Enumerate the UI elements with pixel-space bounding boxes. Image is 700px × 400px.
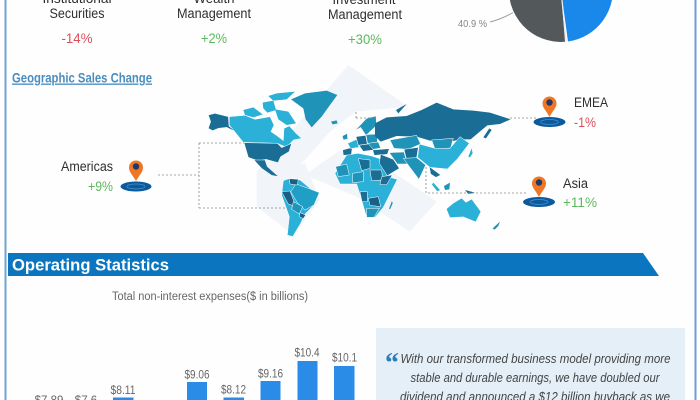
map: europe	[342, 116, 389, 155]
label: americas: Americas	[61, 159, 113, 174]
segment: investment management: Management	[328, 7, 402, 22]
segment: investment management: +30%	[348, 31, 382, 47]
icon: americas pin	[120, 160, 152, 192]
bar chart: non-interest expenses	[35, 348, 357, 400]
panel: segment sales change	[42, 0, 402, 47]
label: asia: Asia	[563, 176, 588, 191]
panel: quote	[376, 328, 685, 400]
bar chart: non-interest expenses: $8.11	[110, 385, 136, 397]
world map	[208, 65, 511, 237]
quote text: With our transformed business model providing more	[400, 351, 670, 366]
bar chart: non-interest expenses: $9.06	[184, 370, 210, 382]
dashed connector: americas	[158, 143, 290, 208]
map: asia	[375, 103, 511, 194]
heading banner: operating statistics	[8, 253, 659, 276]
map: south america	[282, 178, 319, 237]
label: emea: EMEA	[574, 95, 608, 110]
segment: wealth management: Management	[177, 6, 251, 21]
quote text: stable and durable earnings, we have doubled our	[410, 370, 660, 385]
icon: asia pin	[523, 176, 555, 207]
dashed connector: emea	[356, 112, 537, 118]
heading: geographic sales change: Geographic Sales Change	[12, 70, 152, 86]
segment: institutional securities: -14%	[62, 30, 92, 46]
chart title: Total non-interest expenses($ in billions)	[112, 291, 308, 303]
map: oceania	[447, 198, 500, 230]
segment: institutional securities	[42, 0, 112, 46]
map: north america	[208, 91, 338, 177]
label: asia	[563, 176, 597, 210]
heading banner: operating statistics: Operating Statistics	[12, 256, 169, 274]
pie label	[458, 12, 513, 30]
dashed connector: asia	[426, 167, 528, 193]
icon: quote mark: “	[385, 348, 399, 379]
pie label: 40.9 %	[458, 18, 487, 30]
icon: emea pin	[534, 97, 566, 127]
label: asia: +11%	[563, 194, 597, 210]
bar chart: non-interest expenses: $8.12	[221, 384, 246, 396]
label: americas: +9%	[88, 178, 113, 194]
map background chevrons	[257, 65, 437, 235]
pie chart	[458, 0, 613, 42]
label: emea: -1%	[574, 114, 596, 130]
bar chart: non-interest expenses: $10.1	[332, 352, 357, 364]
segment: wealth management: +2%	[201, 30, 227, 46]
segment: investment management	[328, 0, 402, 47]
label: americas	[61, 159, 113, 194]
quote text	[400, 351, 670, 400]
bar chart: non-interest expenses: $9.16	[258, 368, 283, 380]
label: emea	[574, 95, 608, 130]
map: africa	[335, 153, 397, 217]
bar chart: non-interest expenses: $10.4	[294, 348, 320, 360]
segment: wealth management	[177, 0, 251, 46]
segment: institutional securities: Securities	[50, 6, 105, 21]
